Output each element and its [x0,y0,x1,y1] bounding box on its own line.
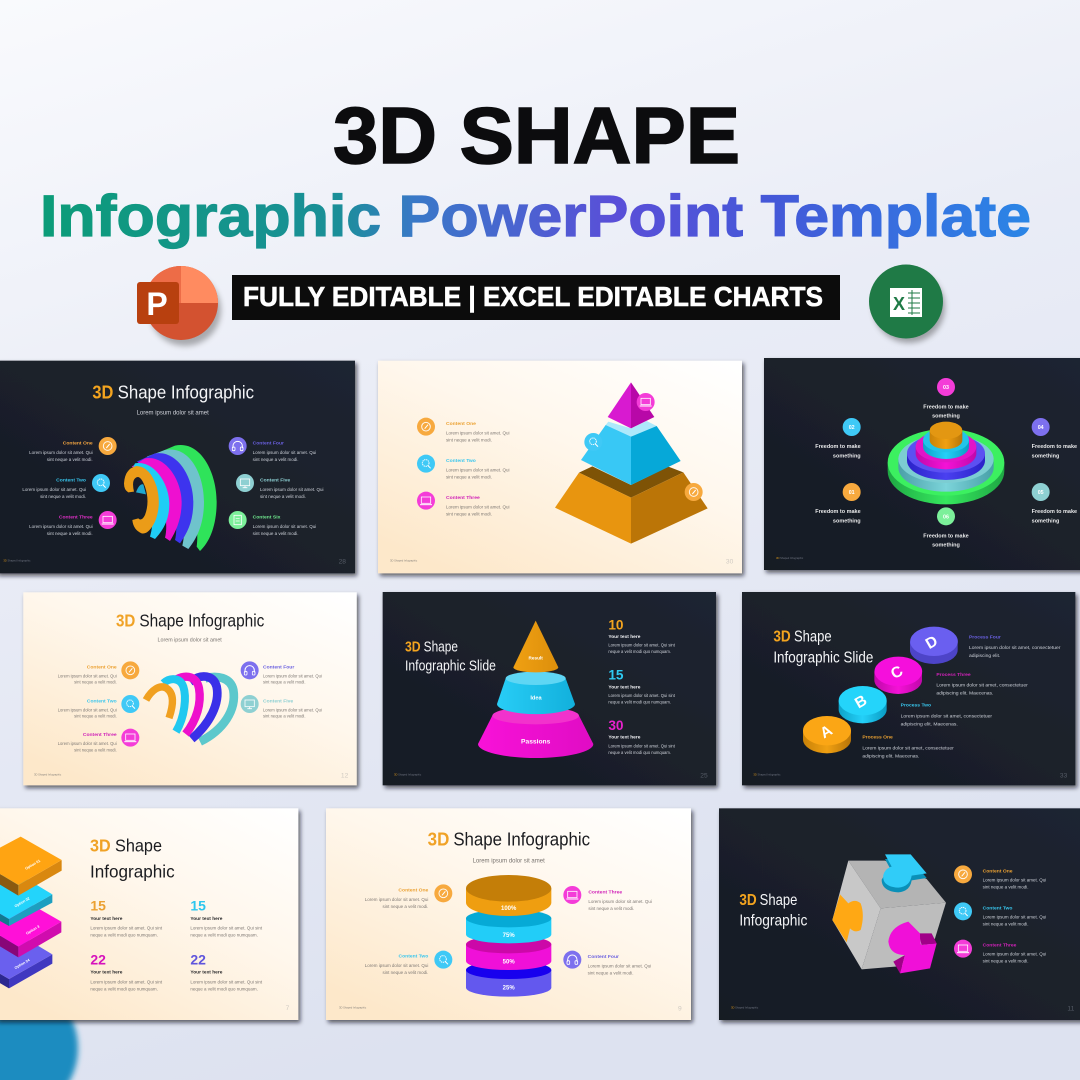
slide background [326,808,691,1020]
stat: 22 purple [190,952,263,991]
slide title: Shape Infographic [118,381,254,402]
slide title: Shape [115,836,162,856]
item: content five: Content Five [260,477,290,483]
slide footer: 3D Shaped Infographic [776,556,804,560]
item: 03: 03 [943,385,949,391]
chart: stacked cylinders 100 to 25 percent: 50% [503,960,515,966]
slide background [0,808,298,1020]
item: content two: Content Two [56,477,86,483]
slide background [383,592,716,785]
stat: 15 cyan: Your text here [190,916,223,922]
item: content two: Lorem ipsum dolor sit amet. Qui [22,487,86,492]
item: content five [241,695,322,719]
slide title: 3D [92,381,113,402]
item: 01: something [833,518,861,524]
item: 03: something [932,414,960,420]
item: 05: something [1032,518,1059,524]
slide footer [731,1005,1075,1012]
stat: 10 [608,617,676,654]
slide title: Infographic Slide [405,659,496,675]
chart: concentric 3D arcs [124,445,217,551]
slide title [773,629,873,666]
item: 06: Freedom to make [923,533,969,539]
stat: 15 orange [90,898,163,937]
stat: 10: Your text here [608,634,641,640]
chart: stacked cylinders 100 to 25 percent: 100% [501,906,517,912]
item: content five: sint neque a velit modi. [263,714,306,719]
item: content five: Lorem ipsum dolor sit amet. Qui [263,707,322,712]
item: content one: sint neque a velit modi. [446,437,492,442]
item: 01: Freedom to make [815,509,861,515]
chart: stepped discs A to D: C [888,663,906,683]
main title: 3D SHAPE [333,91,740,180]
item: 02: Freedom to make [815,444,861,450]
item: 04: something [1032,453,1059,459]
chart: stepped discs A to D: A [817,722,835,742]
item: content two: sint neque a velit modi. [74,714,117,719]
item: content two: Lorem ipsum dolor sit amet. Qui [983,915,1046,920]
decorative blue circle [0,978,78,1080]
item: content three: Content Three [83,732,117,738]
slide title: Infographic [90,861,175,881]
chart: arch bands [146,676,234,742]
item: 02: 02 [849,425,855,431]
item: 06 [923,507,969,549]
item: content one: sint neque a velit modi. [47,457,93,462]
stat: 30: neque a velit modi quo numquam. [608,750,671,755]
item: content two: Lorem ipsum dolor sit amet. Qui [365,963,428,968]
item: process one: Lorem ipsum dolor sit amet, consectetuer [862,745,954,751]
item: content four [241,661,322,685]
item: content two: Content Two [87,698,117,704]
chart: layered cone: Result [529,656,543,661]
stat: 15 cyan: 15 [190,898,206,914]
item: content two: Content Two [983,905,1012,911]
slide title [90,836,175,881]
slide title: Shape [794,629,832,646]
item: process three: Lorem ipsum dolor sit amet, consectetuer [936,683,1028,689]
item: content three: Lorem ipsum dolor sit amet. Qui [29,524,93,529]
stat: 15: neque a velit modi quo numquam. [608,699,671,704]
stat: 15: Lorem ipsum dolor sit amet. Qui sint [608,693,676,698]
item: 05: Freedom to make [1032,509,1077,515]
slide footer [390,558,734,565]
item: content one [954,865,1046,890]
chart: stacked cylinders 100 to 25 percent [466,875,551,997]
slide footer: 3D Shaped Infographic [339,1006,367,1010]
subtitle: Infographic PowerPoint Template [40,184,1031,249]
item: content one: sint neque a velit modi. [382,904,428,909]
slide footer: 12 [341,772,349,779]
slide: dark stacked disc [764,358,1080,570]
stat: 22 magenta: Lorem ipsum dolor sit amet. Qui sint [90,980,163,985]
item: content three: Lorem ipsum dolor sit amet. Qui [446,505,510,510]
stat: 10: Lorem ipsum dolor sit amet. Qui sint [608,643,676,648]
slide title: 3D [428,829,449,850]
item: content one: Content One [446,421,476,427]
item: content six: Lorem ipsum dolor sit amet. Qui [253,524,316,529]
slide background [742,592,1075,785]
slide title [405,640,496,675]
slide title: Infographic [739,913,807,930]
slide footer: 3D Shaped Infographic [3,559,31,563]
slide footer: 11 [1067,1005,1075,1012]
stat: 30 [608,718,676,755]
item: content two: sint neque a velit modi. [983,922,1029,927]
item: content six [229,511,316,536]
slide 9: light cylinder stack [326,808,691,1020]
slide 12: light arches [23,592,357,785]
item: process one [862,735,954,759]
slide footer: 3D Shaped Infographic [394,773,422,777]
chart: 3D puzzle cube [832,854,946,973]
banner: fully editable: FULLY EDITABLE | EXCEL EDITABLE CHARTS [243,281,823,312]
item: content one: Lorem ipsum dolor sit amet. Qui [58,673,117,678]
slide background [378,361,742,573]
chart: stacked cylinders 100 to 25 percent: 75% [503,933,515,939]
slide footer: 9 [678,1005,682,1012]
stat: 22 purple: Your text here [190,970,223,976]
item: process two: adipiscing elit. Maecenas. [901,721,958,727]
slide title: Infographic Slide [773,649,873,666]
item: content three: Lorem ipsum dolor sit amet. Qui [58,741,117,746]
item: content one [58,661,139,685]
stat: 10: 10 [608,617,624,632]
chart: stepped discs A to D: D [923,633,941,653]
item: process four [969,634,1061,659]
stat: 15: 15 [608,668,624,683]
item: content two: sint neque a velit modi. [382,970,428,975]
slide footer [3,558,346,565]
item: content four: Lorem ipsum dolor sit amet. Qui [588,963,651,968]
item: content four: Content Four [253,440,284,446]
item: 01: 01 [849,490,855,496]
stat: 22 magenta: Your text here [90,970,123,976]
item: content one [417,418,510,442]
item: content three: Content Three [588,890,622,896]
item: content two: Content Two [446,458,476,464]
item: 05 [1032,483,1077,524]
chart: stepped discs A to D: B [852,692,870,712]
slide footer [394,772,708,779]
item: content six: sint neque a velit modi. [253,531,299,536]
item: content four: sint neque a velit modi. [588,970,634,975]
item: content one: Lorem ipsum dolor sit amet. Qui [365,897,428,902]
slide 25: dark cone [383,592,716,785]
item: 03: Freedom to make [923,404,969,410]
icon: PowerPoint logo [137,266,221,346]
slide subtitle: Lorem ipsum dolor sit amet [473,858,545,864]
item: process one: Process One [862,735,893,741]
banner: fully editable [232,275,840,320]
icon: Excel logo [869,264,945,343]
slide footer: 3D Shaped Infographic [731,1006,759,1010]
chart: stacked cylinders 100 to 25 percent: 25% [503,986,515,992]
icon: Excel logo: X [893,294,905,314]
stat: 22 purple: 22 [190,952,206,968]
slide 28: dark arcs [0,361,355,573]
slide title [739,892,807,930]
item: content two [954,902,1046,927]
item: 02 [815,418,861,459]
item: content four: sint neque a velit modi. [263,680,306,685]
item: 04 [1032,418,1077,459]
item: content three: sint neque a velit modi. [588,906,634,911]
item: content three [58,729,139,753]
slide title: Shape Infographic [453,829,590,850]
item: content one: Content One [63,440,93,446]
chart: layered cone: Idea [530,695,543,701]
item: 05: 05 [1038,490,1044,496]
chart: stacked concentric discs [888,422,1004,504]
item: content five: Lorem ipsum dolor sit amet. Qui [260,487,324,492]
stat: 30: 30 [608,718,624,733]
item: process two: Process Two [901,703,931,709]
item: content three: Content Three [446,495,480,501]
stat: 15 orange: neque a velit modi quo numquam. [90,932,158,937]
item: process four: Lorem ipsum dolor sit amet, consectetuer [969,645,1061,651]
item: content two [58,695,139,719]
item: 06: 06 [943,514,949,520]
item: content two [365,951,452,975]
slide title: 3D [90,836,111,856]
slide 11: dark puzzle cube [719,808,1080,1020]
stat: 15 orange: Your text here [90,916,123,922]
chart: isometric layer stack: Option 3 [25,925,40,936]
item: content three: sint neque a velit modi. [74,748,117,753]
slide title: Shape Infographic [139,611,264,631]
item: content two: sint neque a velit modi. [40,494,86,499]
slide footer: 3D Shaped Infographic [753,773,781,777]
item: content four: Content Four [263,665,294,671]
slide footer: 30 [726,558,734,565]
chart: isometric layer stack: Option 04 [14,958,31,970]
chart: three layer pyramid [555,382,708,544]
item: 06: something [932,543,960,549]
slide title: 3D [405,640,421,656]
slide background [23,592,357,785]
item: content one: sint neque a velit modi. [74,680,117,685]
stat: 15 cyan: neque a velit modi quo numquam. [190,932,258,937]
stat: 15 orange: 15 [90,898,106,914]
slide footer: 28 [339,558,346,565]
slide background [0,361,355,573]
item: content three: Lorem ipsum dolor sit amet. Qui [983,952,1046,957]
chart: isometric layer stack: Option 01 [25,859,41,871]
item: 03 [923,378,969,420]
slide footer: 25 [700,772,708,779]
item: process one: adipiscing elit. Maecenas. [862,753,919,759]
item: content six: Content Six [253,514,281,520]
item: content three [563,886,652,911]
slide 30: light pyramid [378,361,742,573]
chart: layered cone [478,621,593,758]
item: content one: Lorem ipsum dolor sit amet. Qui [29,450,93,455]
stat: 15 cyan: Lorem ipsum dolor sit amet. Qui sint [190,926,263,931]
item: process three: Process Three [936,672,971,678]
item: content two: Lorem ipsum dolor sit amet. Qui [58,707,117,712]
slide subtitle: Lorem ipsum dolor sit amet [158,638,222,644]
item: content three [29,511,117,536]
item: content one: Content One [983,868,1013,874]
item: content three: sint neque a velit modi. [47,531,93,536]
slide 7: light stacked layers [0,808,298,1020]
item: process three [936,672,1028,697]
slide footer [339,1005,682,1012]
item: content four: sint neque a velit modi. [253,457,299,462]
item: content three: sint neque a velit modi. [446,512,492,517]
item: content two: Content Two [399,954,428,960]
item: content five: Content Five [263,698,293,704]
item: 02: something [833,453,861,459]
item: content two: sint neque a velit modi. [446,474,492,479]
slide title: 3D [739,892,757,909]
item: content five [236,474,324,499]
stat: 22 magenta: 22 [90,952,106,968]
stat: 15 [608,668,676,704]
item: content one [365,884,452,909]
item: content one: Content One [87,665,117,671]
item: process two [901,703,992,727]
item: content one: Lorem ipsum dolor sit amet. Qui [446,430,510,435]
item: content four: Lorem ipsum dolor sit amet. Qui [263,673,322,678]
slide 33: dark process discs [742,592,1075,785]
icon: pyramid markers [584,393,703,501]
slide footer [753,772,1068,779]
stat: 22 magenta: neque a velit modi quo numquam. [90,986,158,991]
item: content four: Lorem ipsum dolor sit amet. Qui [253,450,316,455]
item: content three: Content Three [983,942,1017,948]
item: content three [954,940,1046,964]
icon: PowerPoint logo: P [146,286,168,322]
item: content one: Lorem ipsum dolor sit amet. Qui [983,878,1046,883]
item: content three: Content Three [59,514,93,520]
slide footer: 33 [1060,772,1068,779]
item: content one: Content One [398,888,429,894]
slide title: Shape [760,892,797,909]
slide background [719,808,1080,1020]
stat: 22 magenta [90,952,163,991]
slide background [764,358,1080,570]
item: process four: adipiscing elit. [969,653,1000,659]
stat: 15 orange: Lorem ipsum dolor sit amet. Qui sint [90,926,163,931]
item: content three [417,492,510,517]
slide footer [34,772,349,779]
slide footer: 3D Shaped Infographic [34,773,62,777]
item: content three: sint neque a velit modi. [983,959,1029,964]
item: content four: Content Four [588,954,619,960]
item: content two [417,455,510,479]
slide title: 3D [116,611,135,631]
chart: isometric layer stack: Option 02 [14,897,30,908]
slide footer: 3D Shaped Infographic [390,559,418,563]
item: process two: Lorem ipsum dolor sit amet, consectetuer [901,713,992,719]
item: process four: Process Four [969,634,1001,640]
item: 04: Freedom to make [1032,444,1077,450]
item: content four [563,951,651,975]
stat: 30: Lorem ipsum dolor sit amet. Qui sint [608,743,676,748]
item: content two: Lorem ipsum dolor sit amet. Qui [446,467,510,472]
item: content five: sint neque a velit modi. [260,494,306,499]
chart: isometric layer stack [0,837,62,988]
stat: 22 purple: Lorem ipsum dolor sit amet. Qui sint [190,980,263,985]
stat: 15: Your text here [608,684,641,690]
stat: 15 cyan [190,898,263,937]
stat: 30: Your text here [608,735,641,741]
slide page number: 7 [286,1005,290,1012]
item: content one: sint neque a velit modi. [983,885,1029,890]
stat: 10: neque a velit modi quo numquam. [608,649,671,654]
slide title: Shape [424,640,458,656]
item: content four [229,437,316,462]
slide title: 3D [773,629,791,646]
slide subtitle: Lorem ipsum dolor sit amet [137,411,209,417]
item: process three: adipiscing elit. Maecenas. [936,691,993,697]
item: content three: Lorem ipsum dolor sit amet. Qui [588,899,652,904]
item: 04: 04 [1038,425,1044,431]
chart: layered cone: Passions [521,738,551,745]
stat: 22 purple: neque a velit modi quo numquam. [190,986,258,991]
chart: stepped discs A to D [803,627,958,753]
item: 01 [815,483,861,524]
item: content two [22,474,110,499]
item: content one [29,437,117,462]
